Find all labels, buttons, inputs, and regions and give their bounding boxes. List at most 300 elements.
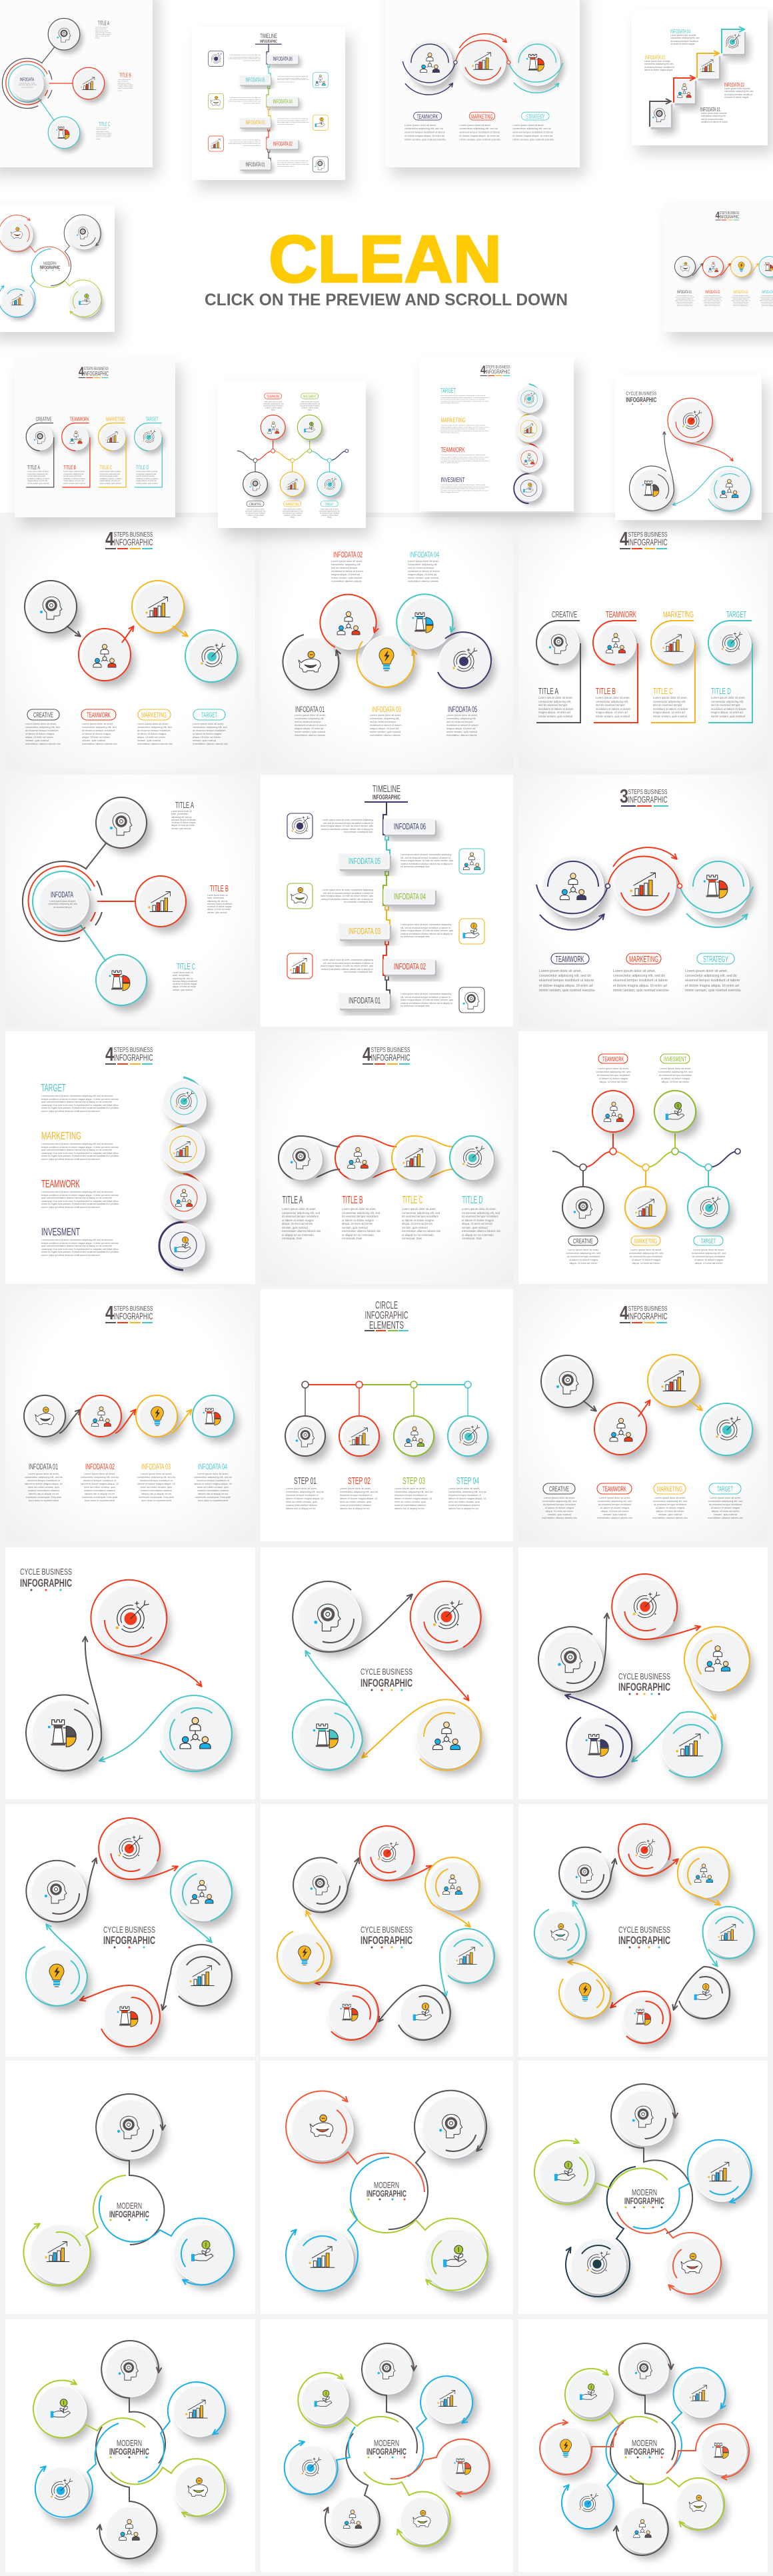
column labels and text: TITLE B (596, 686, 616, 696)
preview: 4 columns with brackets: Lorem ipsum dolor sit amet, consectetur adipiscing elit, sed do eiusmod tempor incididunt ut labore et dolore magna aliqua. Ut enim ad minim veniam, quis nostrud. (63, 471, 85, 484)
six cycle discs (26, 1818, 232, 2047)
heading: modern infographic (624, 2438, 664, 2459)
preview: 3 steps: MARKETING (471, 113, 493, 121)
preview: 3 steps: Lorem ipsum dolor sit amet, consectetur adipiscing elit, sed do eiusmod tempor incididunt ut labore et dolore magna aliqua. Ut enim ad minim veniam, quis nostrud exercita- (459, 124, 501, 141)
list text: Lorem ipsum dolor sit amet, consectetur adipiscing elit, sed do eiusmod tempor incididunt ut labore et dolore magna aliqua. Ut enim ad minim veniam, quis nostrud exercitation ullamco laboris nisi ut aliquip ex ea commodo consequat. Duis aute irure dolor in reprehenderit in voluptate velit esse cillum dolore eu fugiat nulla pariatur. Excepteur sint occaecat cupidatat non proident, sunt in culpa qui officia deserunt mollit anim id est laborum. (41, 1239, 119, 1257)
heading: modern infographic: INFOGRAPHIC (109, 2446, 149, 2457)
heading: cycle business infographic: INFOGRAPHIC (361, 1677, 412, 1689)
heading: 4 steps business infographic: 4 (363, 1044, 371, 1065)
preview: hub with three titles: INFODATA (20, 76, 34, 82)
staircase text: INFODATA 02 (724, 82, 744, 88)
preview: 4 columns with brackets: MARKETING (106, 416, 125, 422)
panel: 3 steps (518, 775, 768, 1027)
pills and text: MARKETING (629, 954, 658, 964)
preview: 4 columns with brackets: CREATIVE (36, 416, 52, 422)
panel: cycle 3 (5, 1547, 255, 1799)
preview: timeline: Lorem ipsum dolor sit amet, consectetur adipiscing elit, sed do eiusmod tempor incididunt ut labore et dolore magna aliqua. Ut enim ad minim veniam, quis nostrud exercitation ullamco. (277, 118, 309, 125)
step text: Lorem ipsum dolor sit amet, consectetur adipiscing elit, sed do eiusmod tempor incididunt ut labore et dolore magna aliqua. Ut enim ad minim veniam, quis nostrud exercitation ullamco laboris nisi ut aliquip ex ea commodo consequat. Duis aute irure dolor in reprehenderit (81, 1473, 119, 1502)
modern hub with 6 satellites (33, 2341, 226, 2559)
panel: cycle 4 (261, 1547, 513, 1799)
pills and text: Lorem ipsum dolor sit amet, consectetur adipiscing elit, sed do eiusmod tempor incididunt ut labore et dolore magna aliqua. Ut enim ad minim veniam, quis nostrud exercita- (539, 969, 595, 993)
timeline body text: Lorem ipsum dolor sit amet, consectetur adipiscing elit, sed do eiusmod tempor incididunt ut labore et dolore magna aliqua. Ut enim ad minim veniam, quis nostrud exercitation ullamco laboris nisi ut aliquip ex ea commodo consequat duis. (400, 993, 453, 1007)
preview: vertical list: STEPS BUSINESS (486, 365, 510, 369)
modern hub with 8 satellites (540, 2343, 749, 2555)
discs with looping arrows (283, 594, 491, 690)
step text: INFODATA 04 (198, 1462, 227, 1471)
heading: 4 steps business infographic (105, 529, 153, 550)
preview: tree wave: INVESMENT (303, 395, 317, 399)
timeline body text (319, 819, 454, 1009)
preview: hub with three titles (0, 0, 153, 167)
pill labels: TARGET (201, 711, 217, 719)
pills and text: INVESMENT (664, 1056, 686, 1063)
hub and spokes diagram (23, 797, 186, 1005)
panel: timeline (261, 775, 513, 1027)
list text: TARGET (41, 1083, 66, 1094)
panel: 5 overlapping steps (261, 517, 513, 769)
timeline heading (365, 783, 408, 802)
preview: timeline: Lorem ipsum dolor sit amet, consectetur adipiscing elit, sed do eiusmod tempor incididunt ut labore et dolore magna aliqua. Ut enim ad minim veniam, quis nostrud exercitation ullamco. (229, 54, 261, 61)
preview: vertical list: Lorem ipsum dolor sit amet, consectetur adipiscing elit, sed do eiusmod tempor incididunt ut labore et dolore magna aliqua. Ut enim ad minim veniam, quis nostrud exercitation ullamco laboris nisi ut aliquip ex ea commodo consequat. Duis aute irure dolor in reprehenderit in voluptate velit esse cillum dolore eu fugiat nulla pariatur. (440, 454, 489, 463)
list text: Lorem ipsum dolor sit amet, consectetur adipiscing elit, sed do eiusmod tempor incididunt ut labore et dolore magna aliqua. Ut enim ad minim veniam, quis nostrud exercitation ullamco laboris nisi ut aliquip ex ea commodo consequat. Duis aute irure dolor in reprehenderit in voluptate velit esse cillum dolore eu fugiat nulla pariatur. Excepteur sint occaecat cupidatat non proident, sunt in culpa qui officia deserunt mollit anim id est laborum. (41, 1095, 119, 1113)
preview: 3 steps: Lorem ipsum dolor sit amet, consectetur adipiscing elit, sed do eiusmod tempor incididunt ut labore et dolore magna aliqua. Ut enim ad minim veniam, quis nostrud exercita- (512, 124, 554, 141)
preview: hub with three titles: TITLE B (119, 73, 131, 79)
step text: STEP 04 (456, 1475, 479, 1487)
pills and text (542, 1483, 743, 1520)
pills and text: TEAMWORK (602, 1485, 626, 1493)
preview: horizontal 4 steps: INFODATA 02 (705, 291, 720, 295)
heading: 4 steps business infographic: INFOGRAPHIC (113, 537, 153, 547)
preview: tree wave: Lorem ipsum dolor sit amet, consectetur adipiscing elit, sed do eiusmod tempor incididunt ut labore et dolore magna aliqua. (300, 401, 320, 411)
list text: TEAMWORK (41, 1179, 80, 1190)
step text: INFODATA 02 (85, 1462, 115, 1471)
timeline tag labels: INFODATA 05 (349, 856, 381, 866)
preview: vertical list: Lorem ipsum dolor sit amet, consectetur adipiscing elit, sed do eiusmod tempor incididunt ut labore et dolore magna aliqua. Ut enim ad minim veniam, quis nostrud exercitation ullamco laboris nisi ut aliquip ex ea commodo consequat. Duis aute irure dolor in reprehenderit in voluptate velit esse cillum dolore eu fugiat nulla pariatur. (440, 484, 489, 493)
heading: cycle business infographic: INFOGRAPHIC (618, 1934, 670, 1947)
preview: hub with three titles: Lorem ipsum dolor sit amet, consectetur adipiscing elit, sed do eiusmod tempor incididunt ut labore et dolore magna aliqua. Ut enim ad minim veniam. (96, 127, 111, 139)
pills and text (539, 953, 743, 999)
heading: cycle business infographic: CYCLE BUSINESS (618, 1671, 670, 1681)
list text: MARKETING (41, 1131, 81, 1142)
heading: cycle business infographic (618, 1925, 670, 1948)
three discs with arrows (536, 847, 753, 930)
heading: 4 steps business infographic: INFOGRAPHIC (113, 1052, 153, 1063)
column text: Lorem ipsum dolor sit amet, consectetur adipiscing elit, sed do eiusmod tempor incididunt ut labore et dolore magna aliqua. Ut enim ad minim veniam, quis nostrud exercitation ullamco laboris nisi ut aliquip ex ea commodo consequat. Duis (282, 1207, 321, 1240)
hub text: Lorem ipsum dolor sit amet, consectetur adipiscing elit, sed do eiusmod tempor (48, 900, 77, 909)
panel: modern 7 (261, 2319, 513, 2572)
preview: horizontal 4 steps: STEPS BUSINESS (720, 211, 740, 215)
bottom texts: INFODATA 05 (448, 705, 477, 714)
eight cycle discs (534, 1824, 754, 2043)
preview: cycle 3: INFOGRAPHIC (626, 397, 656, 404)
modern hub with 5 satellites (534, 2084, 752, 2297)
panel: cycle 8 (518, 1804, 768, 2057)
heading: 3 steps business infographic: INFOGRAPHIC (628, 794, 668, 805)
heading: modern infographic: INFOGRAPHIC (109, 2209, 149, 2219)
pills and text (566, 1054, 726, 1265)
preview: 4 columns with brackets: TITLE D (136, 465, 149, 471)
preview: horizontal 4 steps: Lorem ipsum dolor sit amet, consectetur adipiscing elit, sed do eiusmod tempor incididunt ut labore et dolore magna aliqua. Ut enim ad minim veniam, quis nostrud exercitation ullamco laboris nisi ut aliquip ex ea. (732, 295, 750, 307)
pill labels: CREATIVE (33, 711, 53, 719)
heading: 4 steps business infographic: 4 (620, 1303, 628, 1324)
preview: horizontal 4 steps: 4 (716, 211, 720, 221)
preview: 4 columns with brackets: Lorem ipsum dolor sit amet, consectetur adipiscing elit, sed do eiusmod tempor incididunt ut labore et dolore magna aliqua. Ut enim ad minim veniam, quis nostrud. (136, 471, 158, 484)
pills and text: CREATIVE (573, 1238, 593, 1245)
preview: 4 columns with brackets: 4 (79, 364, 85, 378)
step text: Lorem ipsum dolor sit amet, consectetur adipiscing elit, sed do eiusmod tempor incididunt ut labore et dolore magna aliqua. Ut enim ad minim veniam, quis nostrud exercitation ullamco laboris nisi ut aliquip ex ea commodo consequat. Duis aute irure dolor in reprehenderit (25, 1473, 63, 1502)
heading: cycle business infographic: INFOGRAPHIC (20, 1577, 72, 1589)
heading: modern infographic: MODERN (117, 2438, 142, 2448)
list text: Lorem ipsum dolor sit amet, consectetur adipiscing elit, sed do eiusmod tempor incididunt ut labore et dolore magna aliqua. Ut enim ad minim veniam, quis nostrud exercitation ullamco laboris nisi ut aliquip ex ea commodo consequat. Duis aute irure dolor in reprehenderit in voluptate velit esse cillum dolore eu fugiat nulla pariatur. Excepteur sint occaecat cupidatat non proident, sunt in culpa qui officia deserunt mollit anim id est laborum. (41, 1191, 119, 1209)
step text: STEP 01 (294, 1475, 317, 1487)
preview: 3 steps: STRATEGY (526, 113, 545, 121)
heading: circle infographic elements: ELEMENTS (369, 1320, 404, 1331)
pills and text: STRATEGY (703, 954, 728, 964)
preview: 4 columns with brackets (15, 358, 175, 517)
heading: cycle business infographic (618, 1671, 670, 1695)
preview: timeline: INFODATA 03 (245, 119, 265, 125)
preview: modern hub: MODERN (43, 261, 57, 266)
preview: 3 steps: TEAMWORK (416, 113, 438, 121)
timeline tag labels (349, 821, 426, 1005)
timeline tag labels: INFODATA 06 (394, 821, 426, 831)
column labels and text: CREATIVE (552, 609, 577, 619)
heading: cycle business infographic (361, 1925, 412, 1948)
panel: 4 steps zig-zag with arrows (5, 517, 255, 769)
column text: TITLE B (343, 1195, 363, 1206)
heading: cycle business infographic (361, 1667, 412, 1691)
timeline body text: Lorem ipsum dolor sit amet, consectetur adipiscing elit, sed do eiusmod tempor incididunt ut labore et dolore magna aliqua. Ut enim ad minim veniam, quis nostrud exercitation ullamco laboris nisi ut aliquip ex ea commodo consequat duis. (400, 853, 453, 868)
pill labels: MARKETING (141, 711, 167, 719)
panel: horizontal 4 steps (5, 1289, 255, 1541)
heading: 4 steps business infographic: 4 (105, 1303, 114, 1324)
timeline body text: Lorem ipsum dolor sit amet, consectetur adipiscing elit, sed do eiusmod tempor incididunt ut labore et dolore magna aliqua. Ut enim ad minim veniam, quis nostrud exercitation ullamco laboris nisi ut aliquip ex ea commodo consequat duis. (321, 819, 373, 833)
panel: 4 columns with brackets (518, 517, 768, 769)
panel: modern 5 (518, 2061, 768, 2314)
page background white (0, 0, 773, 513)
staircase text: INFODATA 03 (645, 55, 665, 61)
heading: circle infographic elements (365, 1300, 408, 1331)
column labels and text (538, 609, 746, 718)
heading: modern infographic: INFOGRAPHIC (367, 2188, 406, 2199)
preview: horizontal 4 steps: INFOGRAPHIC (720, 215, 739, 220)
modern hub with 4 satellites (286, 2091, 488, 2291)
heading: modern infographic (109, 2438, 149, 2459)
heading: cycle business infographic: INFOGRAPHIC (103, 1934, 155, 1947)
preview: timeline: Lorem ipsum dolor sit amet, consectetur adipiscing elit, sed do eiusmod tempor incididunt ut labore et dolore magna aliqua. Ut enim ad minim veniam, quis nostrud exercitation ullamco. (277, 160, 309, 167)
step text: STEP 03 (402, 1475, 425, 1487)
timeline body text: Lorem ipsum dolor sit amet, consectetur adipiscing elit, sed do eiusmod tempor incididunt ut labore et dolore magna aliqua. Ut enim ad minim veniam, quis nostrud exercitation ullamco laboris nisi ut aliquip ex ea commodo consequat duis. (321, 889, 373, 903)
pills and text: TARGET (701, 1238, 716, 1245)
heading: circle infographic elements: CIRCLE (375, 1300, 398, 1311)
heading: 4 steps business infographic: INFOGRAPHIC (628, 1311, 668, 1321)
preview: tree wave: TARGET (325, 503, 334, 507)
preview: horizontal 4 steps (663, 204, 773, 332)
preview: 4 columns with brackets: Lorem ipsum dolor sit amet, consectetur adipiscing elit, sed do eiusmod tempor incididunt ut labore et dolore magna aliqua. Ut enim ad minim veniam, quis nostrud. (99, 471, 122, 484)
list text: INVESMENT (41, 1227, 80, 1238)
preview: horizontal 4 steps: Lorem ipsum dolor sit amet, consectetur adipiscing elit, sed do eiusmod tempor incididunt ut labore et dolore magna aliqua. Ut enim ad minim veniam, quis nostrud exercitation ullamco laboris nisi ut aliquip ex ea. (675, 295, 694, 307)
three cycle discs (26, 1580, 232, 1771)
preview: 3 steps: Lorem ipsum dolor sit amet, consectetur adipiscing elit, sed do eiusmod tempor incididunt ut labore et dolore magna aliqua. Ut enim ad minim veniam, quis nostrud exercita- (404, 124, 446, 141)
preview: timeline: INFODATA 05 (245, 77, 265, 83)
zig-zag discs (541, 1355, 752, 1455)
preview: 4 columns with brackets: TITLE C (99, 465, 112, 471)
preview: 4 columns with brackets: Lorem ipsum dolor sit amet, consectetur adipiscing elit, sed do eiusmod tempor incididunt ut labore et dolore magna aliqua. Ut enim ad minim veniam, quis nostrud. (27, 471, 49, 484)
heading: 4 steps business infographic (620, 529, 668, 550)
heading: modern infographic: INFOGRAPHIC (624, 2195, 664, 2206)
top texts: INFODATA 02 (333, 550, 363, 559)
title blocks: Lorem ipsum dolor sit amet, consectetur adipiscing elit, sed do eiusmod tempor incididunt ut labore et dolore magna aliqua. Ut enim ad minim veniam, quis nostrud. (173, 971, 197, 991)
heading: modern infographic: MODERN (632, 2187, 657, 2197)
bottom texts (295, 705, 479, 737)
preview: 4 columns with brackets: STEPS BUSINESS (84, 367, 109, 371)
bottom texts: INFODATA 01 (295, 705, 325, 714)
panel: cycle 6 (5, 1804, 255, 2057)
heading: cycle business infographic: CYCLE BUSINESS (20, 1567, 72, 1577)
heading: modern infographic: MODERN (374, 2438, 399, 2448)
preview: timeline: TIMELINE (260, 33, 277, 39)
heading: 4 steps business infographic: STEPS BUSINESS (113, 1047, 153, 1054)
panel: linked wave discs (261, 1031, 513, 1284)
step text (286, 1475, 488, 1511)
preview: hub with three titles: Lorem ipsum dolor sit amet, consectetur adipiscing elit, sed do eiusmod tempor incididunt ut labore et dolore magna aliqua. Ut enim ad minim veniam. (118, 79, 133, 91)
panel: modern 6 (5, 2319, 255, 2572)
preview: timeline: INFOGRAPHIC (260, 40, 277, 44)
staircase text: Lorem ipsum dolor sit amet, consectetur adipiscing elit, sed do eiusmod tempor incididunt ut labore et dolore magna aliqua. (644, 60, 674, 71)
title blocks: TITLE C (177, 961, 195, 971)
heading: cycle business infographic: CYCLE BUSINESS (618, 1925, 670, 1935)
pills and text: TEAMWORK (556, 954, 584, 964)
pills and text: TARGET (717, 1485, 733, 1493)
preview: tree wave (218, 381, 366, 528)
heading: cycle business infographic (103, 1925, 155, 1948)
preview: 4 columns with brackets: INFOGRAPHIC (84, 370, 109, 377)
timeline body text: Lorem ipsum dolor sit amet, consectetur adipiscing elit, sed do eiusmod tempor incididunt ut labore et dolore magna aliqua. Ut enim ad minim veniam, quis nostrud exercitation ullamco laboris nisi ut aliquip ex ea commodo consequat duis. (400, 923, 453, 938)
preview: timeline: Lorem ipsum dolor sit amet, consectetur adipiscing elit, sed do eiusmod tempor incididunt ut labore et dolore magna aliqua. Ut enim ad minim veniam, quis nostrud exercitation ullamco. (229, 97, 261, 104)
heading: 4 steps business infographic: 4 (105, 529, 114, 550)
connected step discs (285, 1381, 488, 1456)
staircase steps (650, 29, 744, 127)
preview: 4 columns with brackets: TEAMWORK (70, 416, 89, 422)
staircase text (644, 29, 754, 124)
preview: vertical list (419, 357, 574, 511)
heading: 4 steps business infographic: 4 (105, 1044, 114, 1065)
preview: 4 columns with brackets: TITLE A (27, 465, 40, 471)
heading: modern infographic (624, 2187, 664, 2208)
title blocks: Lorem ipsum dolor sit amet, consectetur adipiscing elit, sed do eiusmod tempor incididunt ut labore et dolore magna aliqua. Ut enim ad minim veniam, quis nostrud. (171, 810, 196, 830)
preview: vertical list: 4 (480, 363, 486, 376)
preview: 3 steps (385, 0, 580, 167)
panel: cycle 7 (261, 1804, 513, 2057)
column text: TITLE D (462, 1195, 482, 1206)
preview: cycle 3: CYCLE BUSINESS (626, 391, 656, 397)
preview: tree wave: MARKETING (286, 503, 299, 507)
preview: hub with three titles: Lorem ipsum dolor sit amet, consectetur adipiscing elit, sed do eiusmod tempor incididunt ut labore et dolore magna aliqua. Ut enim ad minim veniam. (95, 26, 111, 39)
column text (282, 1195, 500, 1245)
four cycle discs (293, 1581, 481, 1770)
heading: modern infographic (109, 2201, 149, 2221)
heading: cycle business infographic: CYCLE BUSINESS (361, 1925, 412, 1935)
preview: tree wave: Lorem ipsum dolor sit amet, consectetur adipiscing elit, sed do eiusmod tempor incididunt ut labore et dolore magna aliqua. (283, 509, 303, 518)
pills and text: Lorem ipsum dolor sit amet, consectetur adipiscing elit, sed do eiusmod tempor incididunt ut labore et dolore magna aliqua. Ut enim ad minim veniam, quis nostrud exercita- (685, 969, 741, 993)
title: CLEAN: CLEAN (269, 222, 502, 297)
preview: vertical list: TEAMWORK (440, 447, 465, 454)
heading: 4 steps business infographic: INFOGRAPHIC (628, 537, 668, 547)
preview: timeline: Lorem ipsum dolor sit amet, consectetur adipiscing elit, sed do eiusmod tempor incididunt ut labore et dolore magna aliqua. Ut enim ad minim veniam, quis nostrud exercitation ullamco. (277, 75, 309, 83)
preview: 4 columns with brackets: TITLE B (63, 465, 76, 471)
title blocks: TITLE A (175, 800, 194, 810)
timeline body text: Lorem ipsum dolor sit amet, consectetur adipiscing elit, sed do eiusmod tempor incididunt ut labore et dolore magna aliqua. Ut enim ad minim veniam, quis nostrud exercitation ullamco laboris nisi ut aliquip ex ea commodo consequat duis. (321, 959, 373, 973)
chain of discs (24, 1395, 234, 1437)
panel: cycle 5 (518, 1547, 768, 1799)
heading: 3 steps business infographic: 3 (620, 786, 628, 807)
column labels and text: TITLE A (538, 686, 558, 696)
heading: cycle business infographic: CYCLE BUSINESS (361, 1667, 412, 1677)
timeline tag labels: INFODATA 03 (349, 926, 381, 936)
heading: 4 steps business infographic (363, 1044, 410, 1065)
bottom texts: INFODATA 03 (372, 705, 401, 714)
heading: 4 steps business infographic: STEPS BUSINESS (113, 1305, 153, 1313)
step text: INFODATA 01 (29, 1462, 58, 1471)
heading: modern infographic (367, 2180, 406, 2200)
heading: cycle business infographic: CYCLE BUSINESS (103, 1925, 155, 1935)
preview: horizontal 4 steps: Lorem ipsum dolor sit amet, consectetur adipiscing elit, sed do eiusmod tempor incididunt ut labore et dolore magna aliqua. Ut enim ad minim veniam, quis nostrud exercitation ullamco laboris nisi ut aliquip ex ea. (703, 295, 722, 307)
preview: vertical list: Lorem ipsum dolor sit amet, consectetur adipiscing elit, sed do eiusmod tempor incididunt ut labore et dolore magna aliqua. Ut enim ad minim veniam, quis nostrud exercitation ullamco laboris nisi ut aliquip ex ea commodo consequat. Duis aute irure dolor in reprehenderit in voluptate velit esse cillum dolore eu fugiat nulla pariatur. (440, 425, 489, 434)
pill labels: TEAMWORK (87, 711, 111, 719)
modern hub with 7 satellites (285, 2343, 490, 2547)
list text (41, 1083, 120, 1261)
step discs and arrows (25, 581, 237, 682)
timeline tag labels: INFODATA 02 (394, 961, 426, 971)
heading: modern infographic (367, 2438, 406, 2459)
heading: 4 steps business infographic: STEPS BUSINESS (628, 1305, 668, 1313)
five cycle discs (538, 1574, 750, 1777)
heading: modern infographic: INFOGRAPHIC (624, 2446, 664, 2457)
column labels and text: TITLE C (653, 686, 673, 696)
wave linked discs (279, 1136, 494, 1180)
heading: cycle business infographic (20, 1567, 72, 1591)
preview: vertical list: TARGET (440, 387, 456, 395)
preview: vertical list: MARKETING (440, 417, 466, 425)
preview: tree wave: Lorem ipsum dolor sit amet, consectetur adipiscing elit, sed do eiusmod tempor incididunt ut labore et dolore magna aliqua. (263, 401, 283, 411)
preview: tree wave: CREATIVE (249, 503, 261, 507)
heading: cycle business infographic: INFOGRAPHIC (361, 1934, 412, 1947)
heading: modern infographic: MODERN (374, 2180, 399, 2190)
step text: Lorem ipsum dolor sit amet, consectetur adipiscing elit, sed do eiusmod tempor incididunt ut labore et dolore magna aliqua. Ut enim ad minim veniam, quis nostrud exercitation ullamco laboris nisi ut aliquip ex ea commodo consequat. Duis aute irure dolor in reprehenderit (137, 1473, 175, 1502)
preview: timeline (192, 27, 345, 180)
timeline tag labels: INFODATA 01 (349, 995, 381, 1005)
panel: vertical list with discs (5, 1031, 255, 1284)
preview: tree wave: TEAMWORK (267, 395, 279, 399)
step text: STEP 02 (348, 1475, 371, 1487)
pills and text: MARKETING (634, 1238, 657, 1245)
heading: 4 steps business infographic: STEPS BUSINESS (628, 531, 668, 539)
title blocks: TITLE B (210, 883, 229, 893)
panel: circle infographic elements (261, 1289, 513, 1541)
timeline heading: TIMELINE (373, 783, 400, 795)
heading: 4 steps business infographic: STEPS BUSINESS (371, 1047, 410, 1054)
column text: Lorem ipsum dolor sit amet, consectetur adipiscing elit, sed do eiusmod tempor incididunt ut labore et dolore magna aliqua. Ut enim ad minim veniam, quis nostrud exercitation ullamco laboris nisi ut aliquip ex ea commodo consequat. Duis (462, 1207, 500, 1240)
heading: 4 steps business infographic (105, 1303, 153, 1324)
heading: modern infographic: MODERN (117, 2201, 142, 2211)
preview: timeline: INFODATA 01 (245, 162, 265, 168)
step text (24, 1462, 233, 1503)
preview: horizontal 4 steps: INFODATA 01 (677, 291, 692, 295)
staircase text: INFODATA 01 (700, 107, 720, 113)
panel: modern 8 (518, 2319, 768, 2572)
preview: timeline: INFODATA 06 (273, 56, 293, 62)
heading: 3 steps business infographic (620, 786, 668, 807)
step text: Lorem ipsum dolor sit amet, consectetur adipiscing elit, sed do eiusmod tempor incididunt ut labore et dolore magna aliqua. Ut enim ad minim veniam, quis nostrud exercitation ullamco laboris nisi ut aliquip ex ea commodo consequat. Duis aute irure dolor in reprehenderit (194, 1473, 232, 1502)
title blocks (171, 800, 233, 991)
column labels and text: TEAMWORK (606, 609, 636, 619)
preview: horizontal 4 steps: INFODATA 03 (733, 291, 748, 295)
heading: 4 steps business infographic: 4 (620, 529, 628, 550)
hub text: INFODATA (51, 890, 73, 899)
preview: 4 columns with brackets: TARGET (146, 416, 159, 422)
heading: 4 steps business infographic (620, 1303, 668, 1324)
heading: 4 steps business infographic (105, 1044, 153, 1065)
seven cycle discs (277, 1826, 494, 2040)
pills and text: CREATIVE (549, 1485, 569, 1493)
panel: modern 4 (261, 2061, 513, 2314)
step text: INFODATA 03 (141, 1462, 171, 1471)
wave tree diagram (552, 1091, 740, 1228)
vertical disc chain (159, 1077, 206, 1270)
column text: Lorem ipsum dolor sit amet, consectetur adipiscing elit, sed do eiusmod tempor incididunt ut labore et dolore magna aliqua. Ut enim ad minim veniam, quis nostrud exercitation ullamco laboris nisi ut aliquip ex ea commodo consequat. Duis (402, 1207, 440, 1240)
panel: tree wave (518, 1031, 768, 1284)
list text: Lorem ipsum dolor sit amet, consectetur adipiscing elit, sed do eiusmod tempor incididunt ut labore et dolore magna aliqua. Ut enim ad minim veniam, quis nostrud exercitation ullamco laboris nisi ut aliquip ex ea commodo consequat. Duis aute irure dolor in reprehenderit in voluptate velit esse cillum dolore eu fugiat nulla pariatur. Excepteur sint occaecat cupidatat non proident, sunt in culpa qui officia deserunt mollit anim id est laborum. (41, 1143, 119, 1161)
preview: vertical list: INFOGRAPHIC (486, 368, 510, 375)
top texts: INFODATA 04 (410, 550, 439, 559)
panel: modern 3 (5, 2061, 255, 2314)
column text: Lorem ipsum dolor sit amet, consectetur adipiscing elit, sed do eiusmod tempor incididunt ut labore et dolore magna aliqua. Ut enim ad minim veniam, quis nostrud exercitation ullamco laboris nisi ut aliquip ex ea commodo consequat. Duis (342, 1207, 381, 1240)
preview: timeline: INFODATA 02 (273, 141, 293, 147)
panel: 4 steps zig-zag variant (518, 1289, 768, 1541)
timeline heading: INFOGRAPHIC (373, 794, 400, 801)
preview: hub with three titles: TITLE C (99, 121, 110, 127)
pills and text: TEAMWORK (602, 1056, 624, 1063)
preview: timeline: Lorem ipsum dolor sit amet, consectetur adipiscing elit, sed do eiusmod tempor incididunt ut labore et dolore magna aliqua. Ut enim ad minim veniam, quis nostrud exercitation ullamco. (229, 139, 261, 147)
pill labels (27, 709, 225, 720)
subtitle: CLICK ON THE PREVIEW AND SCROLL DOWN (205, 291, 568, 309)
pills and text: MARKETING (657, 1485, 682, 1493)
column labels and text: TARGET (726, 609, 746, 619)
bracket discs (536, 621, 752, 723)
preview: vertical list: Lorem ipsum dolor sit amet, consectetur adipiscing elit, sed do eiusmod tempor incididunt ut labore et dolore magna aliqua. Ut enim ad minim veniam, quis nostrud exercitation ullamco laboris nisi ut aliquip ex ea commodo consequat. Duis aute irure dolor in reprehenderit in voluptate velit esse cillum dolore eu fugiat nulla pariatur. (440, 395, 489, 404)
preview: timeline: INFODATA 04 (273, 99, 293, 105)
hub text (48, 890, 77, 915)
top texts (331, 550, 442, 583)
preview: tree wave: Lorem ipsum dolor sit amet, consectetur adipiscing elit, sed do eiusmod tempor incididunt ut labore et dolore magna aliqua. (245, 509, 266, 518)
heading: cycle business infographic: INFOGRAPHIC (618, 1681, 670, 1693)
panel: hub with three titles (5, 775, 255, 1027)
heading: modern infographic: INFOGRAPHIC (367, 2446, 406, 2457)
modern hub with 3 satellites (23, 2094, 234, 2285)
preview: tree wave: Lorem ipsum dolor sit amet, consectetur adipiscing elit, sed do eiusmod tempor incididunt ut labore et dolore magna aliqua. (319, 509, 340, 518)
heading: 4 steps business infographic: INFOGRAPHIC (113, 1311, 153, 1321)
preview: vertical list: INVESMENT (440, 477, 464, 484)
column text: TITLE A (283, 1195, 303, 1206)
preview: modern hub (0, 204, 115, 332)
heading: 3 steps business infographic: STEPS BUSINESS (628, 789, 668, 796)
preview: hub with three titles: Lorem ipsum dolor sit amet, consectetur adipiscing elit, sed do eiusmod tempor (18, 83, 37, 88)
column text: TITLE C (402, 1195, 422, 1206)
preview: hub with three titles: TITLE A (98, 21, 109, 27)
column labels and text: MARKETING (663, 609, 694, 619)
heading: circle infographic elements: INFOGRAPHIC (365, 1310, 408, 1321)
pills and text: Lorem ipsum dolor sit amet, consectetur adipiscing elit, sed do eiusmod tempor incididunt ut labore et dolore magna aliqua. Ut enim ad minim veniam, quis nostrud exercita- (613, 969, 669, 993)
